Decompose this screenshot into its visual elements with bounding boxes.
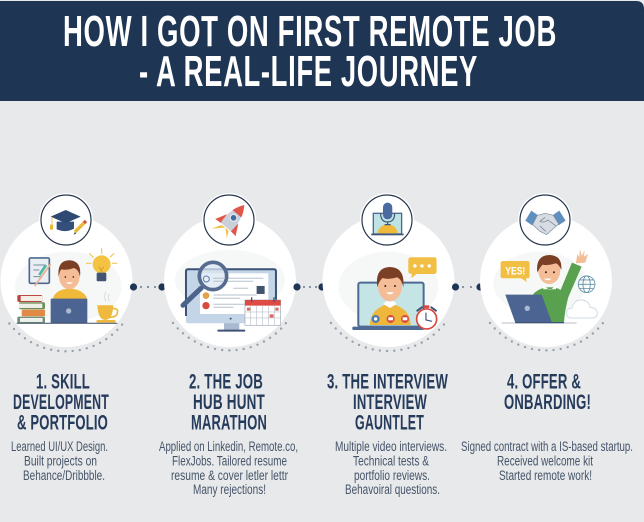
text block: step 2 description: Applied on Linkedin, Remote.co, — [159, 439, 298, 454]
heading: step 1: DEVELOPMENT — [13, 391, 109, 414]
panel: step 3 interview — [322, 193, 454, 351]
text block: step 3 description — [335, 439, 447, 497]
title — [63, 7, 557, 96]
icon: laptop — [502, 295, 577, 323]
heading: step 4: 4. OFFER & — [507, 370, 581, 394]
icon: globe — [578, 276, 595, 293]
icon: laptop screen — [352, 283, 424, 330]
icon: rocket — [202, 193, 256, 247]
text block: step 3 description: Technical tests & — [353, 454, 429, 468]
illustration: person — [370, 267, 411, 325]
heading: step 1: & PORTFOLIO — [17, 412, 108, 434]
heading: step 2: MARATHON — [191, 412, 267, 434]
heading: step 4 — [504, 370, 591, 414]
icon: graduation cap — [39, 193, 93, 247]
icon: magnifying glass — [183, 262, 227, 305]
icon: YES speech bubble: YES! — [505, 265, 525, 277]
icon: coffee cup — [96, 292, 118, 323]
text block: step 4 description — [461, 439, 633, 483]
heading: step 2: 2. THE JOB — [189, 370, 263, 394]
icon: handshake — [518, 193, 572, 247]
heading: step 3: INTERVIEW — [353, 391, 427, 414]
icon: light bulb — [86, 248, 117, 281]
text block: step 3 description: portfolio reviews. — [354, 468, 430, 483]
illustration: student at laptop — [15, 248, 122, 323]
heading: step 4: ONBARDING! — [504, 391, 591, 414]
heading: step 3: GAUNTLET — [355, 412, 424, 434]
heading: step 3 — [327, 370, 448, 434]
text block: step 1 description: Built projects on — [24, 454, 97, 468]
text block: step 2 description — [159, 439, 298, 497]
text block: step 2 description: FlexJobs. Tailored resume — [172, 454, 287, 468]
illustration: books — [17, 295, 45, 323]
heading: step 1 — [13, 370, 109, 434]
icon: calendar — [245, 297, 281, 325]
text block: step 3 description: Behavoiral questions. — [345, 482, 440, 497]
panel: step 1 skill development — [0, 193, 132, 351]
illustration: monitor search — [175, 250, 285, 332]
connector: step 2 to step 3 — [293, 283, 326, 291]
header banner — [0, 1, 644, 101]
illustration: person — [53, 260, 87, 299]
panel: step 2 job hunt — [164, 193, 296, 350]
icon: chat bubble — [408, 257, 437, 278]
illustration: person celebrating — [493, 249, 597, 323]
heading: step 3: 3. THE INTERVIEW — [327, 370, 448, 394]
text block: step 2 description: Many rejections! — [193, 482, 266, 497]
icon: cloud — [567, 300, 597, 318]
text block: step 4 description: Started remote work! — [499, 468, 592, 483]
heading: step 2 — [189, 370, 267, 434]
illustration: video call — [338, 252, 438, 330]
icon: laptop — [51, 299, 87, 323]
text block: step 3 description: Multiple video interviews. — [335, 439, 447, 454]
text block: step 2 description: resume & cover letler lettr — [171, 468, 288, 483]
heading: step 1: 1. SKILL — [36, 370, 90, 394]
icon: microphone on laptop — [360, 193, 414, 247]
heading: step 2: HUB HUNT — [193, 391, 265, 414]
panel: step 4 offer — [480, 193, 612, 350]
connector: step 3 to step 4 — [452, 283, 484, 291]
illustration: person — [533, 249, 588, 323]
icon: alarm clock — [417, 305, 437, 329]
text block: step 1 description — [11, 439, 108, 483]
text block: step 1 description: Learned UI/UX Design. — [11, 439, 108, 454]
text block: step 1 description: Behance/Dribbble. — [23, 468, 105, 483]
icon: clipboard — [29, 258, 51, 286]
text block: step 4 description: Received welcome kit — [497, 454, 593, 468]
connector: step 1 to step 2 — [130, 283, 166, 291]
icon: monitor — [186, 269, 276, 332]
